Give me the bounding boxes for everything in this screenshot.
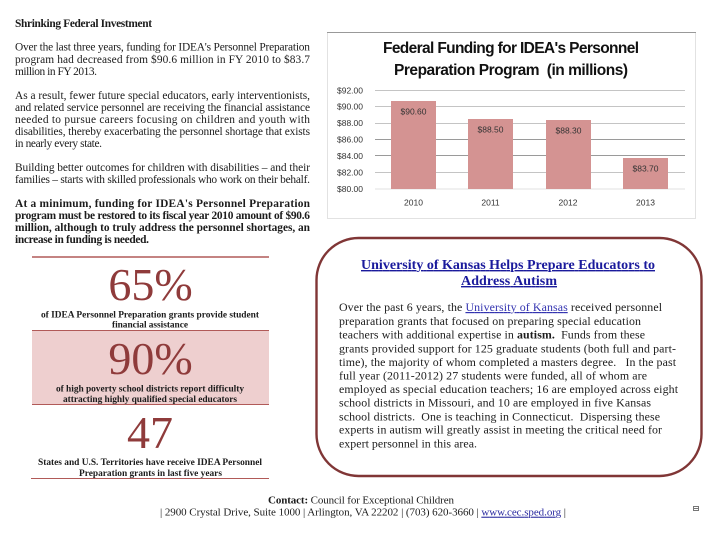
chart title [383, 40, 639, 79]
bar 2013: $83.70 [632, 164, 659, 174]
callout frame [316, 238, 702, 476]
bar 2012 [546, 120, 591, 189]
callout body: grants provided support for 125 graduate students (both full and part- [339, 341, 676, 355]
callout heading: University of Kansas Helps Prepare Educators to [361, 258, 655, 273]
bar 2011 [468, 119, 513, 189]
pink band [32, 330, 269, 404]
paragraph: funding decrease: program had decreased from $90.6 million in FY 2010 to $83.7 [15, 54, 310, 66]
x axis labels: 2011 [481, 198, 500, 208]
paragraph: personnel shortage: needed to pursue careers focusing on children and youth with [15, 114, 310, 126]
callout body: employed as special education teachers; 16 are employed across eight [339, 382, 679, 396]
y axis labels: $86.00 [337, 134, 363, 144]
callout body: experts in autism will greatly assist in meeting the critical need for [339, 423, 662, 437]
footer: contact [160, 494, 566, 519]
callout heading [361, 258, 655, 289]
paragraph: funding call to action: At a minimum, funding for IDEA's Personnel Preparation [15, 198, 311, 210]
grid lines [375, 90, 685, 189]
callout heading: Address Autism [461, 274, 557, 289]
chart title: Federal Funding for IDEA's Personnel [383, 40, 639, 57]
callout body [339, 300, 679, 450]
paragraph: personnel shortage: and related service personnel are receiving the financial assistance [15, 102, 310, 114]
y axis labels: $82.00 [337, 168, 363, 178]
x axis labels [404, 198, 655, 208]
stat: 47 [38, 407, 262, 479]
stat: 65% [41, 259, 260, 331]
y axis labels: $92.00 [337, 86, 363, 96]
callout: University of Kansas [316, 238, 702, 476]
text column: shrinking federal investment [15, 18, 311, 246]
paragraph: personnel shortage [15, 90, 311, 150]
y axis labels: $90.00 [337, 102, 363, 112]
chart title: Preparation Program (in millions) [394, 62, 628, 79]
paragraph: funding decrease [15, 42, 310, 78]
stat: 47: 47 [127, 407, 173, 458]
stat: 90%: 90% [108, 333, 193, 384]
stats panel [31, 257, 269, 479]
stat: 47: States and U.S. Territories have receive IDEA Personnel [38, 458, 262, 468]
callout body: teachers with additional expertise in autism. Funds from these [339, 328, 645, 342]
callout body: expert personnel in this area. [339, 436, 477, 450]
stat: 90%: attracting highly qualified special educators [63, 395, 237, 405]
x axis labels: 2012 [559, 198, 578, 208]
paragraph: funding decrease: million in FY 2013. [15, 66, 97, 78]
x axis labels: 2013 [636, 198, 655, 208]
stat: 47: Preparation grants in last five years [79, 469, 222, 479]
stat: 90%: of high poverty school districts report difficulty [56, 385, 244, 395]
paragraph: funding call to action [15, 198, 311, 246]
paragraph: funding decrease: Over the last three years, funding for IDEA's Personnel Preparation [15, 42, 310, 54]
heading: Shrinking Federal Investment [15, 18, 152, 30]
footer: contact: | 2900 Crystal Drive, Suite 1000 | Arlington, VA 22202 | (703) 620-3660 | www.cec.sped.org | [160, 507, 566, 519]
y axis labels: $88.00 [337, 118, 363, 128]
stat: 65%: financial assistance [112, 321, 188, 331]
callout body: Over the past 6 years, the University of Kansas received personnel [339, 300, 663, 314]
bar 2010: $90.60 [400, 106, 427, 116]
paragraph: personnel shortage: As a result, fewer future special educators, early interventionists, [15, 90, 310, 102]
bar chart: federal funding [327, 32, 696, 218]
paragraph: personnel shortage: in nearly every state. [15, 138, 102, 150]
y axis labels: $84.00 [337, 151, 363, 161]
callout body: school districts. One is teaching in Connecticut. Dispersing these [339, 409, 660, 423]
x axis labels: 2010 [404, 198, 423, 208]
stat: 65%: of IDEA Personnel Preparation grants provide student [41, 311, 260, 321]
callout body: school districts in Missouri, and 10 are employed in five Kansas [339, 396, 651, 410]
paragraph: better outcomes: Building better outcomes for children with disabilities – and their [15, 162, 310, 174]
bar 2013 [623, 158, 668, 189]
bar 2012: $88.30 [556, 126, 582, 136]
paragraph: personnel shortage: disabilities, thereby exacerbating the personnel shortage that exists [15, 126, 311, 138]
stat: 90% [56, 333, 244, 405]
y axis labels: $80.00 [337, 184, 363, 194]
icon: slide number [694, 506, 698, 510]
paragraph: better outcomes: families – starts with skilled professionals who work on their behalf. [15, 174, 310, 186]
bar 2010 [391, 101, 436, 189]
paragraph: funding call to action: increase in funding is needed. [15, 234, 149, 246]
paragraph: better outcomes [15, 162, 310, 186]
stat: 65%: 65% [108, 259, 193, 310]
footer: contact: Contact: Council for Exceptional Children [268, 494, 454, 506]
bar 2011: $88.50 [478, 124, 504, 134]
callout body: preparation grants that focused on preparing special education [339, 314, 641, 328]
paragraph: funding call to action: program must be restored to its fiscal year 2010 amount of $90.6 [15, 210, 310, 222]
stat rules [31, 257, 269, 478]
chart frame [328, 32, 696, 218]
paragraph: funding call to action: million, although to truly address the personnel shortages, an [15, 222, 311, 234]
callout body: full year (2011-2012) 27 students were funded, all of whom are [339, 368, 647, 382]
y axis labels [337, 86, 363, 194]
callout body: time), the majority of whom completed a masters degree. In the past [339, 355, 677, 369]
